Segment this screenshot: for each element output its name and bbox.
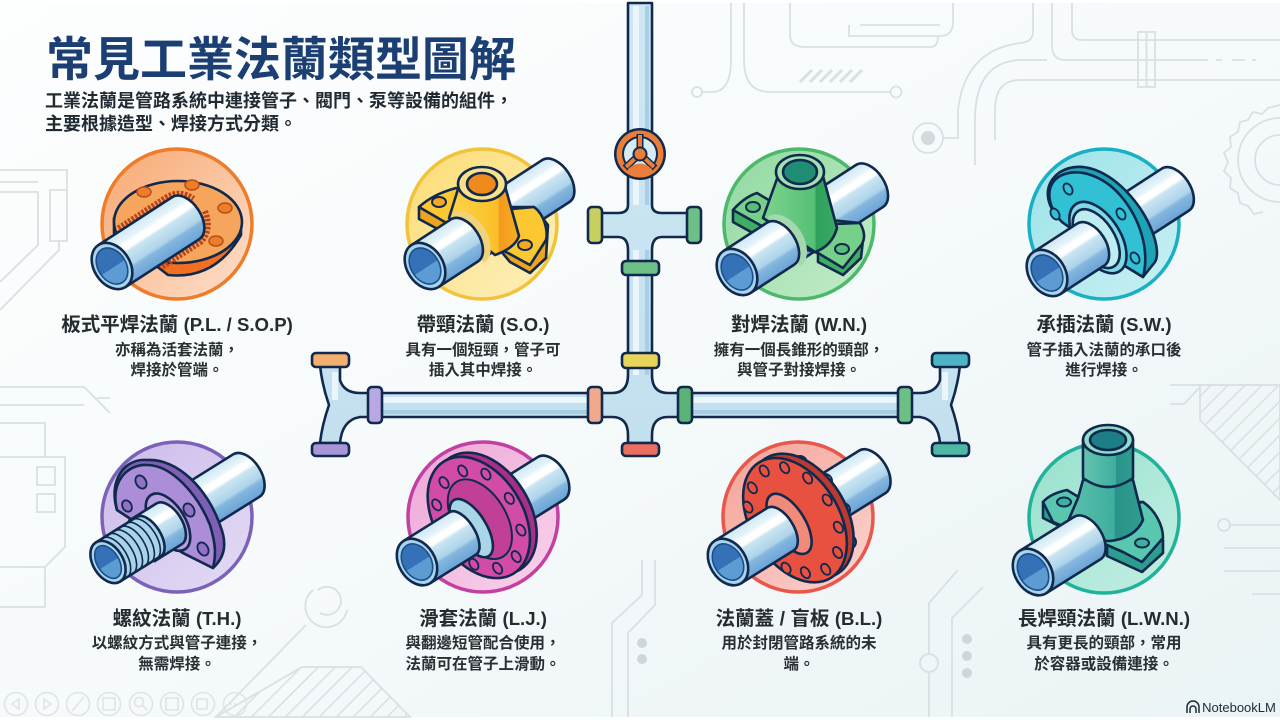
flange 5: threaded T.H. xyxy=(77,442,272,673)
red circle xyxy=(723,442,873,592)
hub and pipe xyxy=(1009,192,1138,315)
flange body xyxy=(419,207,548,273)
back pipe xyxy=(774,157,896,260)
pipe with weld xyxy=(82,184,218,299)
description: 具有更長的頸部，常用 xyxy=(1026,633,1182,652)
description xyxy=(714,340,884,379)
front pipe with weld xyxy=(396,209,494,297)
flange 3: weld neck W.N. xyxy=(708,149,896,379)
NotebookLM watermark: NotebookLM xyxy=(1202,700,1276,715)
teal circle xyxy=(1029,443,1179,593)
intro text: 工業法蘭是管路系統中連接管子、閥門、泵等設備的組件， xyxy=(45,90,513,111)
back pipe xyxy=(463,449,577,546)
flange disc xyxy=(115,460,224,568)
presentation toolbar icons xyxy=(4,692,246,716)
flange 1: plate flange P.L. / S.O.P xyxy=(61,149,293,379)
description: 焊接於管端。 xyxy=(130,360,224,379)
description: 具有一個短頸，管子可 xyxy=(405,340,561,359)
pipe body xyxy=(320,3,960,443)
front pipe with collar xyxy=(441,492,501,564)
description: 法蘭可在管子上滑動。 xyxy=(405,654,561,673)
description: 管子插入法蘭的承口後 xyxy=(1026,340,1182,359)
description xyxy=(721,633,877,673)
label: 長焊頸法蘭 (L.W.N.) xyxy=(1018,608,1190,630)
orange circle xyxy=(102,149,252,299)
description xyxy=(115,340,239,379)
front pipe with weld xyxy=(708,212,810,303)
flange 7: blind B.L. xyxy=(677,435,898,673)
front pipe xyxy=(1004,509,1113,603)
yellow circle xyxy=(407,149,557,299)
description xyxy=(1026,340,1182,379)
purple circle xyxy=(102,442,252,592)
neck xyxy=(763,176,837,252)
label: 板式平焊法蘭 (P.L. / S.O.P) xyxy=(61,314,293,336)
flange 4: socket weld S.W. xyxy=(1009,149,1202,379)
description: 於容器或設備連接。 xyxy=(1034,654,1174,673)
flange disc xyxy=(728,435,875,597)
description: 與翻邊短管配合使用， xyxy=(405,633,561,652)
intro text xyxy=(45,90,513,134)
back pipe xyxy=(154,446,272,546)
description: 端。 xyxy=(783,655,815,673)
description: 插入其中焊接。 xyxy=(429,360,537,379)
label: 帶頸法蘭 (S.O.) xyxy=(416,314,550,336)
intro text: 主要根據造型、焊接方式分類。 xyxy=(45,113,297,134)
back pipe xyxy=(774,443,898,546)
neck xyxy=(449,186,519,255)
description: 進行焊接。 xyxy=(1065,360,1143,379)
threaded pipe xyxy=(77,486,199,595)
back pipe xyxy=(1092,161,1202,256)
label: 承插法蘭 (S.W.) xyxy=(1036,314,1172,336)
flange disc xyxy=(1048,167,1157,277)
central pipe network xyxy=(312,3,969,456)
disc xyxy=(114,218,241,276)
flange disc xyxy=(413,434,558,593)
description xyxy=(405,633,561,673)
green circle xyxy=(724,149,874,299)
description: 用於封閉管路系統的未 xyxy=(721,633,877,652)
flange body xyxy=(733,210,863,275)
hub and front pipe xyxy=(757,487,821,561)
title: 常見工業法蘭類型圖解 xyxy=(46,33,516,86)
description: 與管子對接焊接。 xyxy=(737,360,861,379)
description xyxy=(1026,633,1182,673)
description xyxy=(92,633,262,673)
label: 滑套法蘭 (L.J.) xyxy=(419,608,547,630)
label: 法蘭蓋 / 盲板 (B.L.) xyxy=(716,607,882,630)
description: 擁有一個長錐形的頸部， xyxy=(714,340,884,359)
flange 2: slip-on S.O. xyxy=(396,149,582,379)
description xyxy=(405,340,561,379)
description: 亦稱為活套法蘭， xyxy=(115,340,239,359)
bolts xyxy=(793,456,856,549)
back pipe xyxy=(462,152,582,254)
cyan circle xyxy=(1029,149,1179,299)
label: 螺紋法蘭 (T.H.) xyxy=(113,607,241,630)
pipe connector flanges xyxy=(312,207,969,456)
description: 無需焊接。 xyxy=(138,654,216,673)
valve wheel xyxy=(614,128,666,180)
flange 6: lap joint L.J. xyxy=(364,410,596,673)
icon: NotebookLM logo xyxy=(1187,701,1199,713)
long neck xyxy=(1060,480,1143,541)
description: 以螺紋方式與管子連接， xyxy=(92,633,262,652)
flange body xyxy=(1043,502,1163,572)
label: 對焊法蘭 (W.N.) xyxy=(731,314,867,336)
flange 8: long weld neck L.W.N. xyxy=(1004,425,1190,673)
magenta circle xyxy=(408,442,558,592)
